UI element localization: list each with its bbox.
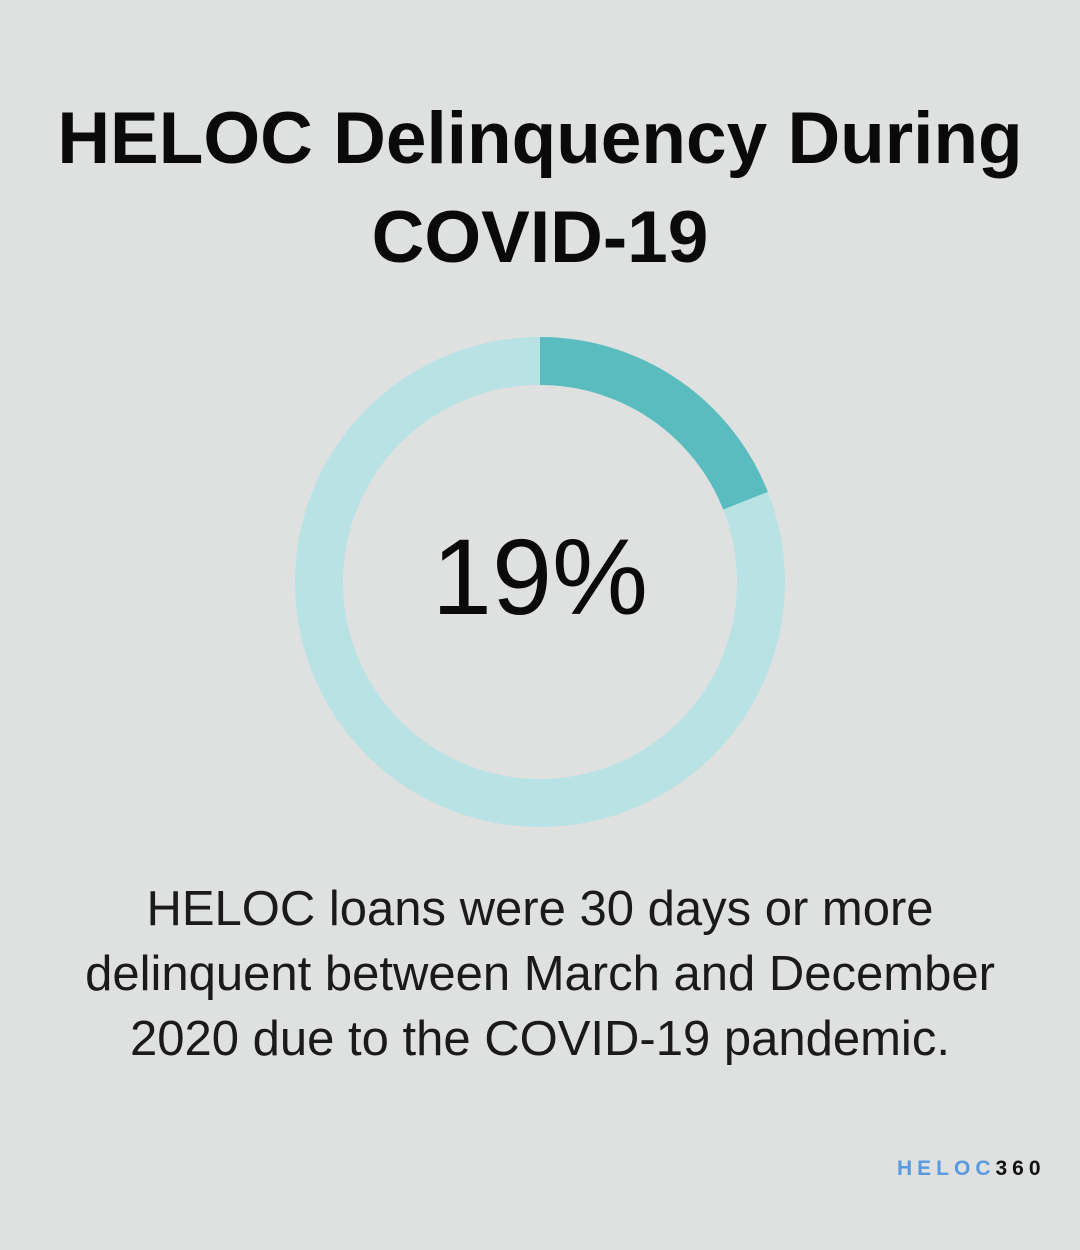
donut chart: 19%: [432, 516, 648, 637]
logo: HELOC360: [897, 1157, 1046, 1180]
description text: delinquent between March and December: [85, 947, 995, 1001]
title: [57, 98, 1023, 278]
description text: 2020 due to the COVID-19 pandemic.: [130, 1012, 950, 1066]
description text: [85, 882, 995, 1066]
title: HELOC Delinquency During: [57, 98, 1023, 179]
description text: HELOC loans were 30 days or more: [146, 882, 934, 936]
title: COVID-19: [372, 197, 708, 278]
